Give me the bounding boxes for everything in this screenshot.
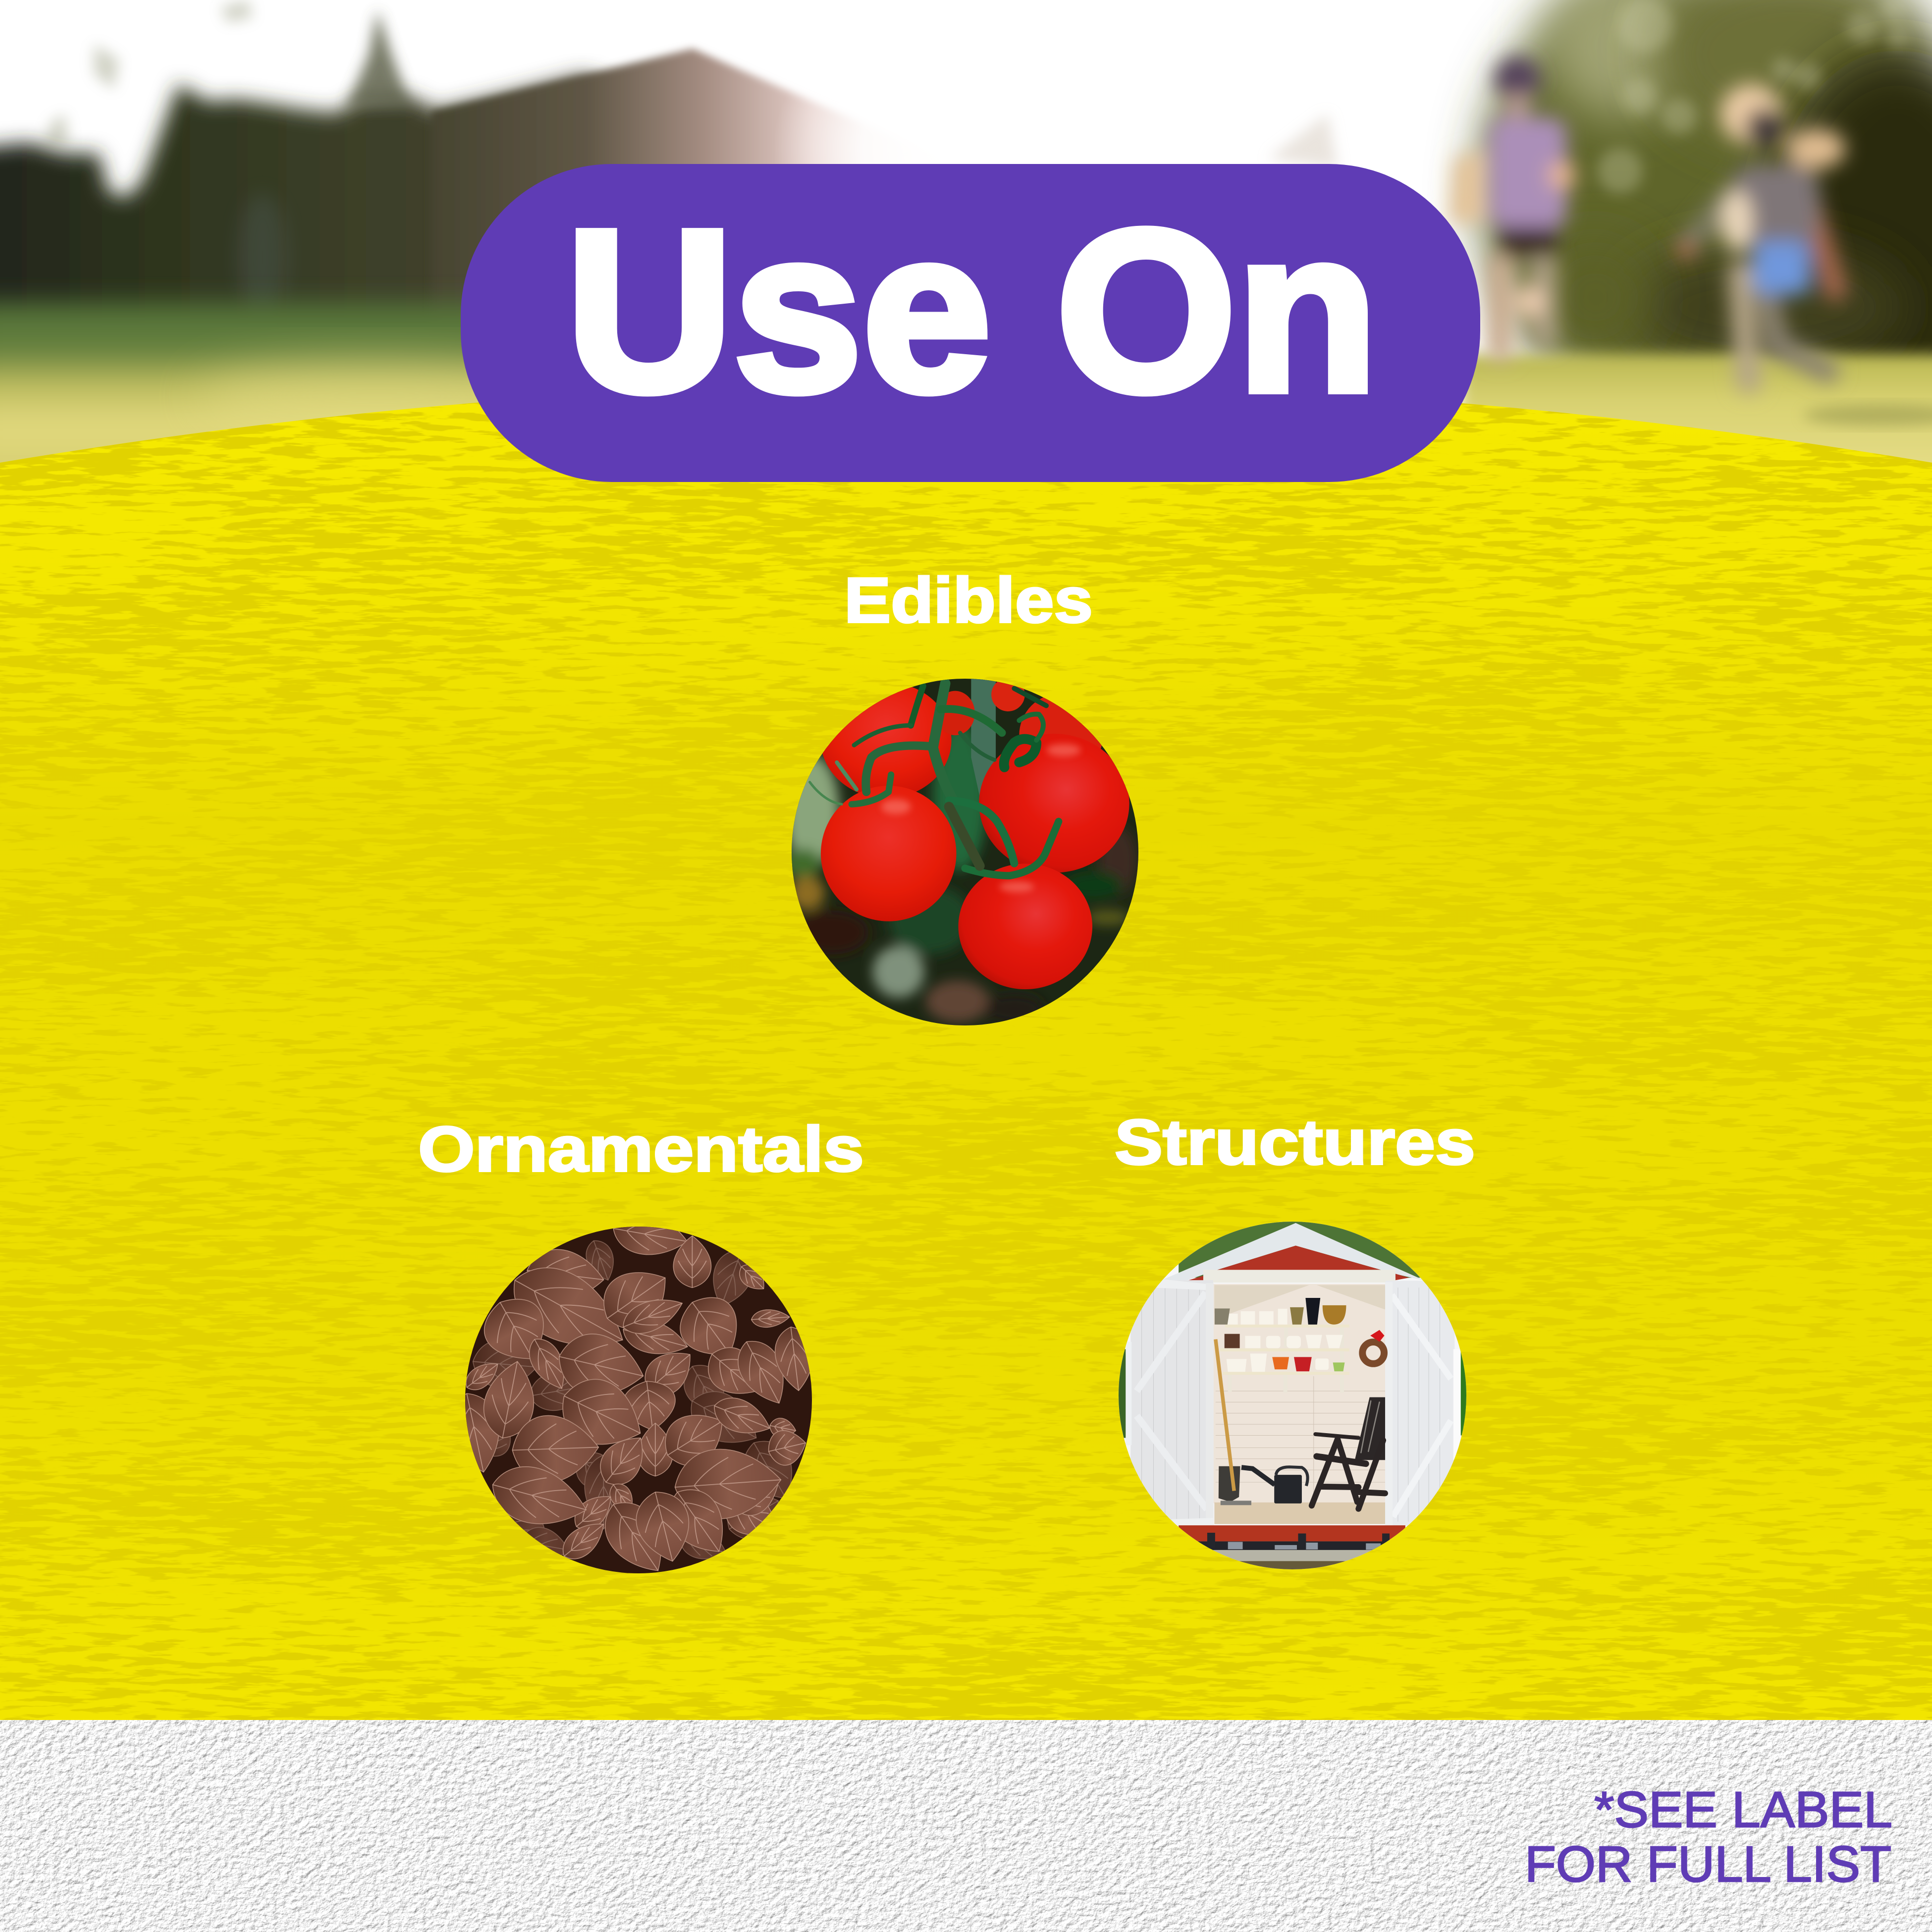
plank seams [1216, 1376, 1386, 1502]
yellow wood-textured panel [0, 297, 1932, 1724]
white plaster footer panel [0, 1720, 1932, 1932]
watering can [1241, 1467, 1308, 1503]
back tomatoes [821, 682, 952, 798]
shovel [1216, 1340, 1251, 1505]
label: Ornamentals: Ornamentals [418, 1114, 864, 1185]
upper-layer leaves [443, 1208, 817, 1584]
small roof far right of the house [1268, 114, 1338, 168]
grass on the left [0, 302, 540, 500]
child two with blue shorts [1677, 84, 1845, 381]
shelves with pots [1215, 1298, 1349, 1393]
bright sunlit grass patch [198, 362, 555, 431]
right door [1385, 1281, 1461, 1526]
interior back wall [1213, 1284, 1386, 1503]
under-layer leaves [471, 1236, 806, 1567]
warm sun glare on the house [773, 0, 1169, 297]
highlights on tomatoes [881, 744, 1081, 892]
background photo: blurred backyard with house and running children [0, 0, 1932, 500]
red base and foundation [1179, 1525, 1405, 1571]
footnote: see label for full list [1525, 1781, 1892, 1892]
blue-grey hints in the tree trunks [238, 193, 287, 322]
footnote: see label for full list: *SEE LABEL [1594, 1781, 1892, 1838]
stems and calyxes [810, 684, 1059, 876]
darker stem section [949, 806, 980, 866]
photo: brown ornamental leaves [443, 1208, 840, 1603]
right tree mass [1481, 0, 1932, 426]
stake [971, 679, 996, 797]
title pill [461, 164, 1480, 482]
house with pink gable [431, 49, 991, 347]
label: Edibles: Edibles [844, 565, 1093, 636]
shadow on right grass [1803, 404, 1932, 426]
blurred foliage background [783, 723, 1137, 1023]
distant tree line on the left [0, 74, 644, 347]
photo: cherry tomatoes [792, 679, 1138, 1025]
grass on the right [1461, 354, 1932, 493]
left door [1126, 1279, 1214, 1526]
bokeh highlights [1597, 0, 1909, 194]
faint branches in the sky [45, 0, 253, 149]
floor [1214, 1503, 1386, 1524]
red gable [1185, 1246, 1409, 1283]
child one in lilac shirt [1449, 56, 1576, 362]
title text: Use On [566, 182, 1378, 439]
tomato left [821, 786, 957, 921]
folding chair [1312, 1397, 1385, 1509]
footnote: see label for full list: FOR FULL LIST [1525, 1836, 1891, 1892]
tomato bottom [958, 863, 1092, 989]
tomato right [979, 734, 1129, 873]
roof [1160, 1223, 1425, 1281]
label: Structures: Structures [1115, 1107, 1475, 1178]
foliage behind shed [1179, 1214, 1425, 1278]
wreath [1362, 1330, 1385, 1364]
photo: garden shed with open doors [1105, 1204, 1499, 1598]
spire of a tall tree [347, 10, 411, 107]
